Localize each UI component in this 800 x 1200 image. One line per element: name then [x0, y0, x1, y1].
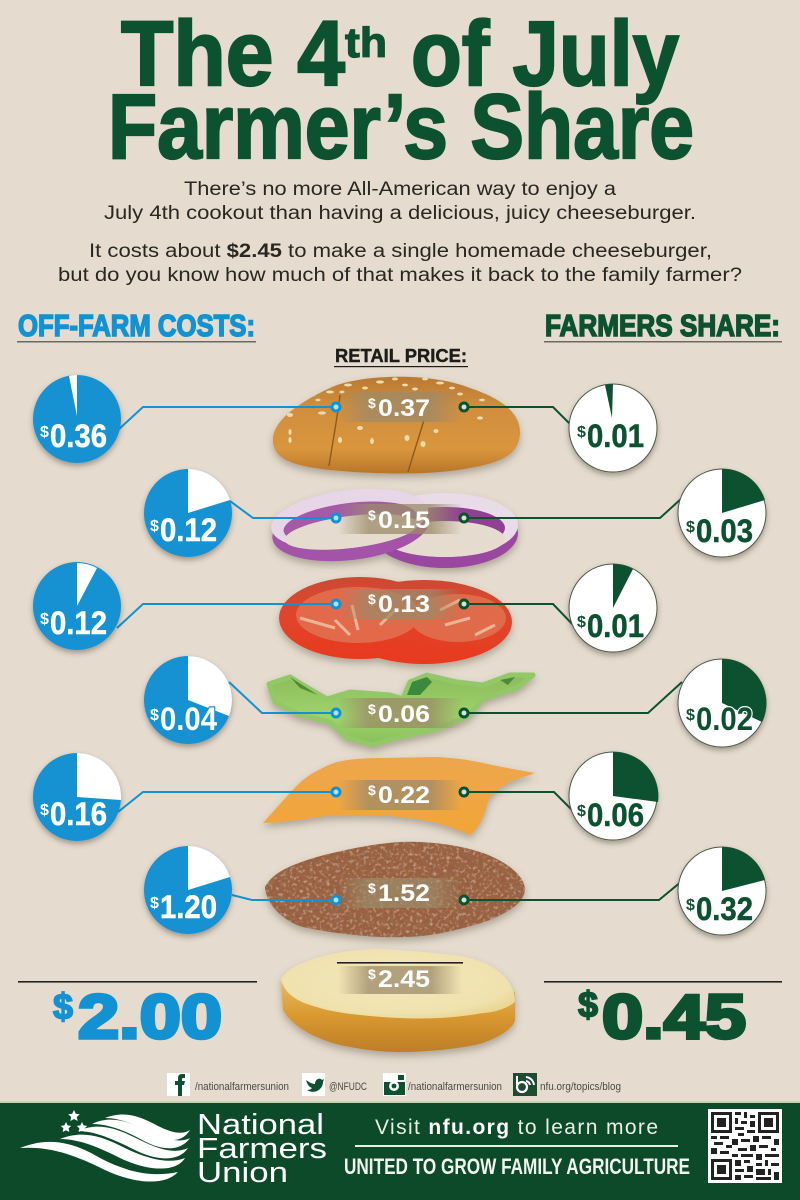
retail price: bun	[338, 392, 462, 422]
pie: off-farm patty: $	[150, 895, 159, 912]
pie: farmer patty: 0.32	[696, 891, 753, 927]
connector lines: farmers share	[464, 407, 682, 900]
pie: farmer bun: $	[577, 424, 586, 441]
heading: off-farm costs: OFF-FARM COSTS:	[18, 308, 255, 343]
retail price: lettuce	[338, 698, 462, 728]
pie: farmer patty	[678, 847, 766, 935]
burger: lettuce	[269, 675, 533, 745]
qr code	[708, 1109, 782, 1183]
pie: farmer cheese: $	[577, 803, 586, 820]
retail price: onion: $	[368, 507, 376, 523]
title: Farmer’s Share	[108, 76, 694, 178]
pie: farmer bun: 0.01	[587, 418, 644, 454]
retail price: total: $	[368, 966, 376, 982]
pie: off-farm bun: $	[40, 424, 49, 441]
burger: tomato slices	[279, 577, 512, 664]
pie: off-farm bun: 0.36	[50, 418, 107, 454]
pie: off-farm onion: 0.12	[160, 512, 217, 548]
retail price: tomato: 0.13	[378, 591, 430, 618]
social links: nfu.org/topics/blog	[540, 1081, 621, 1093]
intro text: There’s no more All-American way to enjoy a	[184, 179, 616, 200]
retail price: onion	[338, 504, 462, 534]
retail price: total: 2.45	[378, 966, 430, 993]
retail price: patty	[338, 878, 462, 908]
call to action	[344, 1116, 690, 1179]
pie: off-farm lettuce: 0.04	[160, 701, 217, 737]
retail price: lettuce: $	[368, 701, 376, 717]
retail price: bun: $	[368, 395, 376, 411]
pie: farmer tomato: $	[577, 614, 586, 631]
left ring	[268, 481, 433, 569]
connector dots	[332, 403, 468, 904]
intro text: July 4th cookout than having a delicious, juicy cheeseburger.	[104, 203, 696, 224]
icon: blog	[513, 1073, 537, 1096]
pie: farmer lettuce: $	[686, 707, 695, 724]
retail price: bun: 0.37	[378, 395, 430, 422]
connector lines: off-farm	[117, 407, 336, 900]
pie: off-farm onion	[144, 469, 232, 557]
pie: farmer tomato	[569, 564, 657, 652]
right ring	[372, 493, 518, 568]
retail price: cheese: $	[368, 782, 376, 798]
pie: off-farm tomato	[33, 562, 121, 650]
pie: farmer lettuce: 0.02	[696, 701, 753, 737]
retail price: cheese: 0.22	[378, 782, 430, 809]
pie: farmer tomato: 0.01	[587, 608, 644, 644]
pie: farmer lettuce	[678, 659, 766, 747]
total: farmers share: $	[578, 984, 598, 1025]
icon: instagram	[383, 1073, 406, 1096]
pie: off-farm tomato: 0.12	[50, 605, 107, 641]
social links: /nationalfarmersunion	[195, 1081, 289, 1093]
footer band	[0, 1101, 800, 1200]
retail price: patty: 1.52	[378, 880, 430, 907]
pie: off-farm tomato: $	[40, 611, 49, 628]
heading: retail price: RETAIL PRICE:	[335, 346, 467, 366]
social links	[167, 1073, 621, 1096]
title: th	[345, 19, 387, 66]
pie: farmer cheese	[569, 752, 658, 840]
retail price: lettuce: 0.06	[378, 701, 430, 728]
total: off-farm: $	[53, 986, 73, 1027]
total: farmers share	[544, 981, 782, 1052]
pie: farmer onion	[678, 469, 766, 557]
pie: farmer cheese: 0.06	[587, 797, 644, 833]
pie: off-farm patty	[144, 846, 232, 934]
social links: /nationalfarmersunion	[408, 1081, 502, 1093]
title: The 4	[121, 3, 345, 105]
burger: bottom bun	[281, 949, 515, 1052]
intro text: but do you know how much of that makes it back to the family farmer?	[58, 265, 742, 286]
logo: organisation name: Union	[197, 1157, 288, 1189]
burger: onion rings	[268, 481, 518, 569]
pie: farmer onion: 0.03	[696, 513, 753, 549]
intro text	[58, 179, 742, 286]
retail price: patty: $	[368, 880, 376, 896]
pie: off-farm bun	[33, 375, 121, 463]
pie: farmer bun	[569, 384, 657, 472]
pie: off-farm lettuce: $	[150, 707, 159, 724]
title: of July	[411, 3, 679, 105]
pie: off-farm lettuce	[144, 656, 232, 744]
pie: off-farm cheese: 0.16	[50, 796, 107, 832]
intro text: It costs about $2.45 to make a single homemade cheeseburger,	[89, 241, 712, 262]
retail price: total	[337, 962, 463, 994]
total: off-farm: 2.00	[78, 983, 222, 1052]
pie: off-farm patty: 1.20	[160, 889, 217, 925]
pie: off-farm onion: $	[150, 518, 159, 535]
logo: organisation name: National	[197, 1109, 324, 1141]
burger: cheese slice	[263, 757, 535, 835]
call to action: Visit nfu.org to learn more	[375, 1116, 658, 1139]
pie: off-farm cheese	[33, 753, 121, 841]
logo: organisation name: Farmers	[197, 1133, 327, 1165]
retail price: tomato	[338, 589, 462, 619]
pie: farmer onion: $	[686, 519, 695, 536]
retail price: tomato: $	[368, 591, 376, 607]
total: off-farm	[18, 981, 257, 1052]
burger: patty	[265, 842, 525, 937]
icon: facebook	[167, 1073, 190, 1096]
retail price: onion: 0.15	[378, 507, 430, 534]
call to action: UNITED TO GROW FAMILY AGRICULTURE	[344, 1154, 690, 1179]
logo: organisation name	[197, 1109, 327, 1189]
total: farmers share: 0.45	[602, 983, 746, 1052]
pie: farmer patty: $	[686, 897, 695, 914]
pie: off-farm cheese: $	[40, 802, 49, 819]
title	[108, 3, 694, 178]
social links: @NFUDC	[329, 1081, 367, 1093]
burger: top bun	[273, 377, 520, 474]
icon: twitter	[302, 1073, 325, 1096]
logo: stars and flag stripes	[20, 1110, 190, 1182]
retail price: cheese	[338, 780, 462, 810]
